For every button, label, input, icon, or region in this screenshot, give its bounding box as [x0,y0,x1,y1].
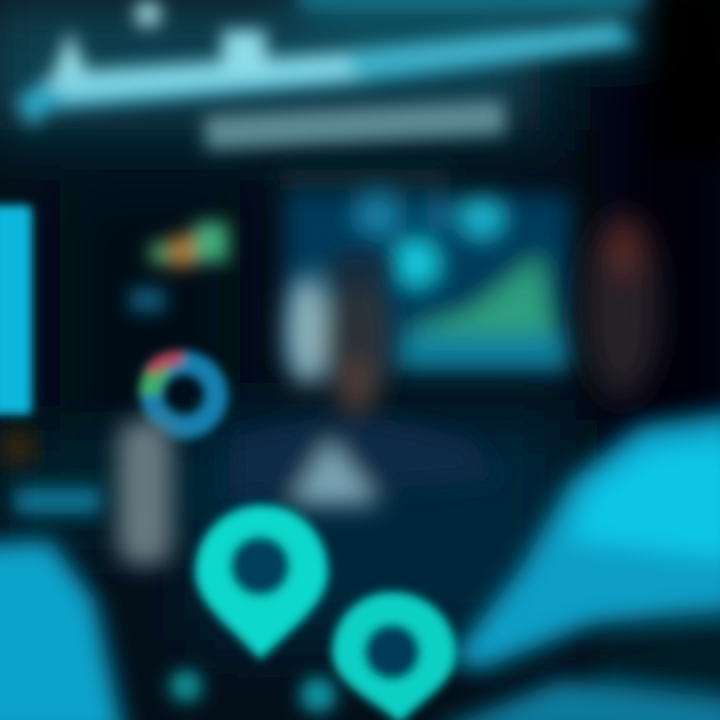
right figure [584,215,660,400]
foreground sleeve right [440,410,720,720]
pin icon small [332,592,456,720]
left figure hand [118,420,172,565]
title [15,0,650,128]
foreground sleeve left [0,540,125,720]
left lower glow [0,430,100,514]
person [230,250,500,505]
top right darkness [650,0,720,160]
pin icon large [195,505,328,660]
donut chart [150,358,216,427]
small bar chart [130,222,228,312]
central screen [280,168,570,371]
left panel [0,205,32,415]
subtitle [204,100,506,150]
small glow dots [170,670,336,713]
